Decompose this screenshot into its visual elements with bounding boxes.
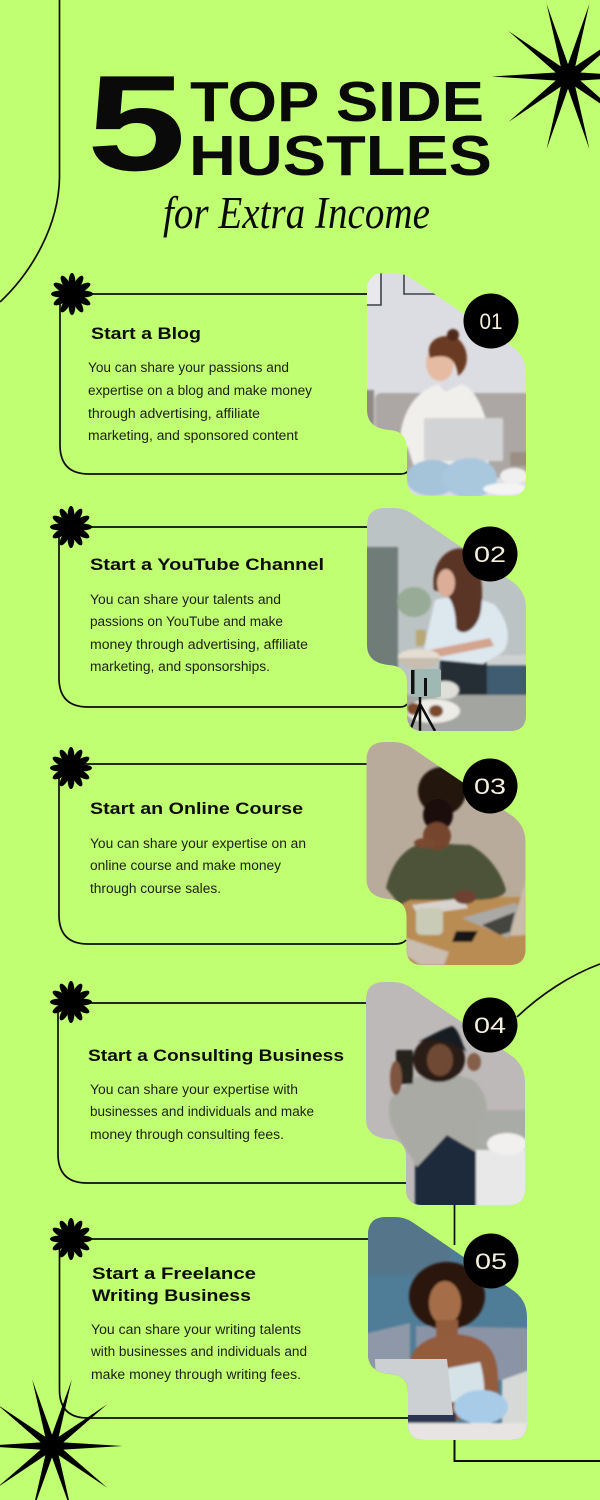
heading 1: Start a Blog	[91, 324, 201, 343]
connector line: right curve to badge 04	[517, 964, 600, 1017]
heading 5: Start a Freelance	[92, 1264, 256, 1283]
card outline 5	[60, 1239, 408, 1418]
title numeral 5: 5	[87, 47, 186, 199]
body text 5: You can share your writing talents	[91, 1322, 301, 1337]
card outline 1	[60, 294, 408, 474]
title	[87, 47, 492, 238]
number badge 01	[464, 294, 518, 348]
body text 1: You can share your passions and	[88, 360, 289, 375]
body text 3: online course and make money	[90, 858, 281, 873]
body text 5: make money through writing fees.	[91, 1367, 301, 1382]
number badge 03: 03	[474, 774, 506, 799]
icon: star bottom left	[0, 1380, 123, 1500]
number badge 02: 02	[474, 542, 506, 567]
connector line: top left curve	[0, 0, 60, 302]
body text 5	[90, 1322, 307, 1382]
card outline 4	[58, 1003, 406, 1183]
panel: Start a Blog	[51, 270, 535, 500]
body text 2	[90, 592, 308, 674]
body text 4: money through consulting fees.	[90, 1127, 284, 1142]
body text 3	[90, 836, 306, 896]
connector line: between photos 04 and 05	[454, 1204, 456, 1245]
card outline 2	[59, 527, 407, 707]
number badge 02	[462, 526, 518, 582]
body text 2: You can share your talents and	[90, 592, 281, 607]
body text 1: through advertising, affiliate	[88, 406, 260, 421]
panel: Start a Freelance Writing Business	[50, 1215, 535, 1448]
body text 3: through course sales.	[90, 881, 221, 896]
icon: star top right	[492, 4, 600, 149]
body text 2: money through advertising, affiliate	[90, 637, 308, 652]
body text 1: expertise on a blog and make money	[88, 383, 312, 398]
body text 4	[90, 1082, 314, 1142]
card outline 3	[59, 764, 406, 944]
body text 3: You can share your expertise on an	[90, 836, 306, 851]
body text 1	[88, 360, 312, 443]
panel: Start a Consulting Business	[50, 980, 535, 1210]
panel: Start an Online Course	[50, 740, 535, 970]
body text 1: marketing, and sponsored content	[88, 428, 298, 443]
photo 1: woman with laptop on sofa	[367, 273, 526, 496]
heading 5	[92, 1264, 256, 1305]
icon: flower 3	[50, 747, 92, 789]
number badge 05	[464, 1234, 518, 1288]
subtitle: for Extra Income	[163, 188, 430, 238]
number badge 04	[462, 998, 518, 1052]
number badge 01: 01	[480, 309, 502, 334]
photo 2: woman filming cooking with phone	[367, 508, 526, 731]
number badge 04: 04	[474, 1013, 506, 1038]
icon: flower 1	[51, 273, 93, 315]
photo 3: woman writing at wooden table	[366, 742, 526, 965]
icon: flower 4	[50, 981, 92, 1023]
body text 4: You can share your expertise with	[90, 1082, 298, 1097]
body text 5: with businesses and individuals and	[90, 1344, 307, 1359]
number badge 03	[462, 758, 518, 814]
number badge 05: 05	[475, 1249, 507, 1274]
body text 2: passions on YouTube and make	[90, 614, 283, 629]
heading 5: Writing Business	[92, 1286, 251, 1305]
heading 2: Start a YouTube Channel	[90, 555, 324, 574]
icon: flower 2	[50, 506, 92, 548]
body text 4: businesses and individuals and make	[90, 1104, 314, 1119]
icon: flower 5	[50, 1218, 92, 1260]
title line: HUSTLES: HUSTLES	[189, 124, 492, 188]
heading 3: Start an Online Course	[90, 799, 303, 818]
title line: TOP SIDE: TOP SIDE	[190, 70, 484, 134]
connector line: bottom right elbow	[454, 1440, 600, 1461]
body text 2: marketing, and sponsorships.	[90, 659, 270, 674]
photo 4: woman taking selfie in hat	[366, 982, 525, 1205]
photo 5: smiling woman with laptop on bed	[368, 1217, 527, 1440]
heading 4: Start a Consulting Business	[88, 1046, 344, 1065]
panel: Start a YouTube Channel	[50, 505, 535, 735]
